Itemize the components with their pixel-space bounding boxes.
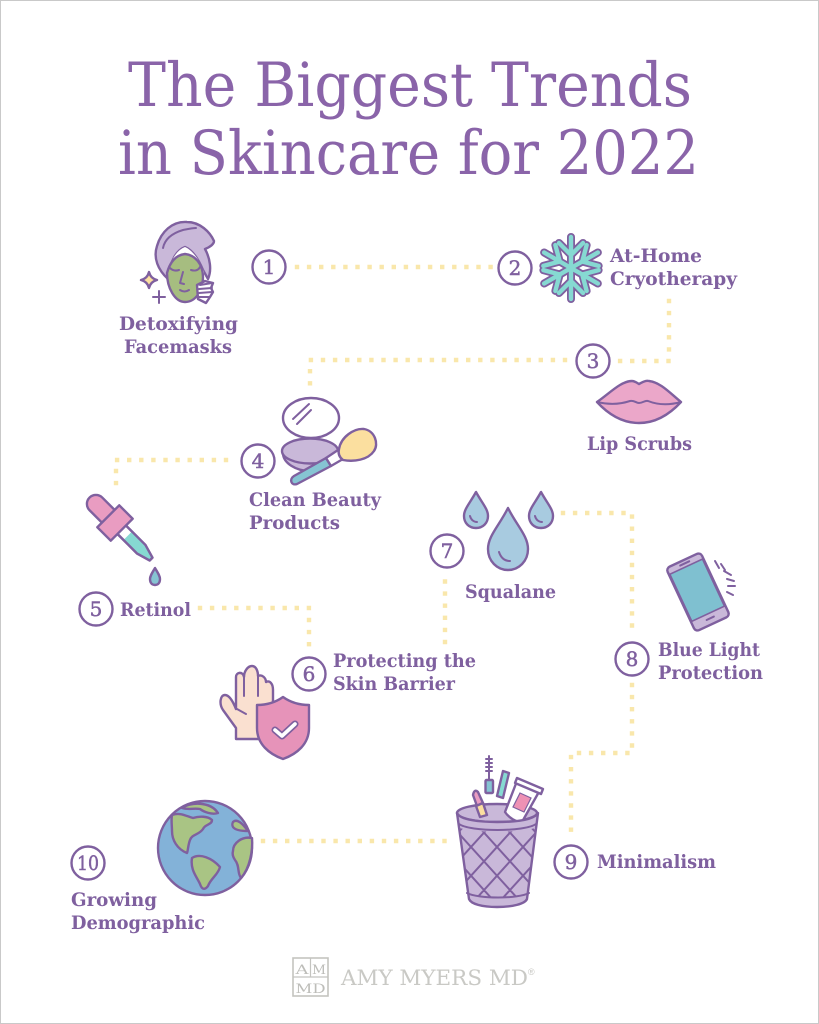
icon: phone [666, 552, 735, 632]
icon: waste basket with cosmetics [456, 755, 544, 908]
number 10 [72, 846, 104, 880]
label: Products [249, 513, 340, 534]
number 6 [292, 658, 326, 690]
label: Detoxifying [119, 314, 238, 335]
icon: three drops [464, 492, 553, 570]
label [658, 640, 764, 684]
trend 7: squalane [430, 492, 556, 603]
label: Growing [71, 890, 157, 911]
label [249, 490, 382, 534]
number 8 [616, 642, 648, 676]
label: Protection [658, 663, 764, 684]
number 2 [498, 252, 532, 284]
number 1 [252, 250, 286, 284]
label: Lip Scrubs [587, 434, 692, 455]
label: Demographic [71, 913, 205, 934]
icon: dropper [79, 487, 162, 585]
logo box: M [312, 963, 326, 978]
title: The Biggest Trends [128, 50, 692, 121]
trend 10: growing demographic [71, 801, 252, 934]
logo wordmark: AMY MYERS MD [340, 966, 528, 990]
label [609, 246, 738, 290]
logo box: A [294, 963, 309, 978]
trend 8: blue light protection [616, 552, 764, 684]
label [71, 890, 205, 934]
registered mark: ® [528, 967, 535, 977]
logo box: MD [296, 982, 326, 997]
icon: globe [158, 801, 252, 895]
label: Clean Beauty [249, 490, 382, 511]
icon: compact and brush [282, 398, 376, 484]
number 10: 10 [77, 851, 99, 875]
icon: hand and shield [221, 666, 309, 759]
icon: lips [597, 381, 681, 423]
label: Retinol [120, 600, 191, 621]
label: Facemasks [124, 337, 232, 358]
label: At-Home [609, 246, 702, 267]
trend 4: clean beauty products [242, 398, 382, 534]
number 9: 9 [565, 850, 577, 874]
title [118, 50, 699, 189]
label [333, 651, 476, 695]
number 1: 1 [263, 255, 275, 279]
number 3: 3 [587, 349, 599, 373]
dotted path connecting the trends [116, 267, 669, 841]
logo box [293, 958, 328, 997]
trend 6: protecting the skin barrier [221, 651, 476, 759]
label: Cryotherapy [610, 269, 738, 290]
number 2: 2 [509, 256, 521, 280]
number 7: 7 [441, 539, 453, 563]
label: Minimalism [597, 852, 716, 873]
trend 1: detoxifying facemasks [119, 222, 286, 358]
trend 3: lip scrubs [576, 344, 692, 455]
number 4 [242, 444, 274, 478]
trend 5: retinol [79, 487, 191, 626]
label: Protecting the [333, 651, 476, 672]
number 8: 8 [626, 647, 638, 671]
label: Skin Barrier [333, 674, 455, 695]
trend 2: at-home cryotherapy [498, 237, 738, 299]
number 4: 4 [252, 449, 264, 473]
label: Blue Light [658, 640, 760, 661]
title: in Skincare for 2022 [118, 118, 699, 189]
icon: face mask [141, 222, 214, 303]
number 6: 6 [303, 662, 315, 686]
number 5: 5 [90, 597, 102, 621]
icon: snowflake [538, 237, 604, 299]
number 9 [554, 846, 588, 878]
trend 9: minimalism [456, 755, 716, 908]
label: Squalane [465, 582, 556, 603]
logo: Amy Myers MD [293, 958, 528, 997]
label [119, 314, 238, 358]
